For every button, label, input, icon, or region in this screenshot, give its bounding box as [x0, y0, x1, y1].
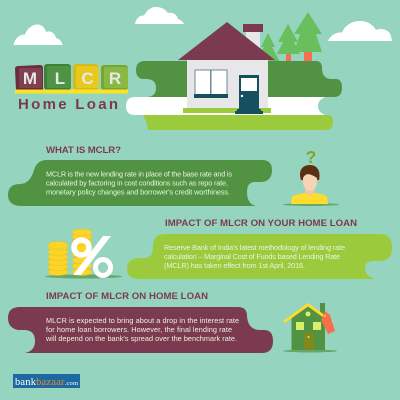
icon: person with question mark: ?: [306, 147, 316, 167]
block C: C: [81, 69, 94, 88]
price tag: [321, 311, 335, 334]
lime hill: [143, 115, 333, 130]
icon: green house with price tag: [283, 303, 337, 352]
percent sign: [73, 236, 111, 276]
panel: impact on your home loan: Reserve Bank of India's latest methodology of lending rate: [164, 243, 345, 252]
panel: impact on home loan: [8, 307, 273, 353]
block R: R: [109, 69, 121, 88]
coin stacks: [48, 229, 92, 276]
icon: cloud left: [14, 24, 62, 45]
grass strip: [183, 108, 271, 113]
white cloud band: [126, 97, 325, 115]
heading: what is MCLR: WHAT IS MCLR?: [46, 145, 121, 156]
panel: impact on your home loan: calculation – Marginal Cost of Funds based Lending Rate: [164, 252, 340, 261]
panel: impact on your home loan: [127, 234, 392, 279]
chimney: [243, 24, 263, 49]
window: [194, 70, 228, 98]
roof: [178, 22, 275, 60]
block M: M: [23, 69, 37, 88]
title: MLCR Home Loan: [15, 64, 128, 113]
panel: what is MCLR: [8, 160, 272, 206]
heading: impact on your home loan: IMPACT OF MLCR ON YOUR HOME LOAN: [165, 218, 357, 229]
logo: bankbazaar.com: bankbazaar.com: [15, 377, 78, 388]
icon: cloud top: [135, 7, 184, 24]
panel: what is MCLR: monetary policy changes and borrower's credit worthiness.: [46, 188, 230, 197]
icon: cloud right: [328, 21, 392, 41]
illustration: house on hill: [126, 12, 342, 130]
trees: [256, 12, 322, 62]
heading: impact on home loan: IMPACT OF MLCR ON HOME LOAN: [46, 291, 208, 302]
door: [235, 75, 263, 114]
house body: [187, 60, 268, 110]
panel: impact on home loan: for home loan borrowers. However, the final lending rate: [46, 325, 232, 334]
panel: impact on your home loan: (MCLR) has taken effect from 1st April, 2016.: [164, 261, 305, 270]
panel: impact on home loan: will depend on the bank's spread over the benchmark rate.: [45, 334, 237, 343]
icon: coins and percent sign: [45, 229, 122, 278]
dark green hedge: [136, 61, 342, 97]
panel: what is MCLR: calculated by factoring in cost conditions such as repo rate,: [46, 179, 228, 188]
block L: L: [55, 69, 65, 88]
yellow underline bar: [15, 90, 128, 94]
subtitle: Home Loan: [18, 96, 118, 113]
panel: impact on home loan: MLCR is expected to bring about a drop in the interest rate: [46, 316, 239, 325]
panel: what is MCLR: MCLR is the new lending rate in place of the base rate and is: [46, 170, 232, 179]
icon: person with question mark: [283, 147, 339, 206]
